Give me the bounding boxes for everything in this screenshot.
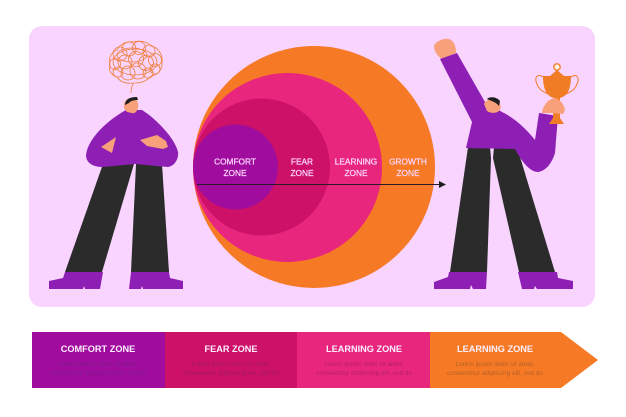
raised fist bbox=[434, 39, 456, 59]
segment: growth arrow: consectetur adipiscing elit, sed do bbox=[447, 370, 543, 377]
comfort zone circle bbox=[193, 124, 278, 210]
growth zone circle bbox=[193, 46, 435, 288]
icon: tangled thought bubble bbox=[109, 41, 162, 93]
body and arms bbox=[440, 53, 558, 172]
segment: learning zone: consectetur adipiscing elit, sed do bbox=[316, 370, 412, 377]
left hand bbox=[101, 137, 116, 153]
hair bbox=[487, 97, 500, 106]
label: learning zone: LEARNING bbox=[335, 156, 377, 166]
torso with crossed arms bbox=[86, 110, 178, 167]
left leg bbox=[450, 147, 491, 272]
segment: growth arrow bbox=[430, 332, 598, 388]
right leg bbox=[131, 164, 169, 272]
panel: background bbox=[29, 26, 595, 307]
segment: learning zone bbox=[297, 332, 430, 388]
segment: comfort zone: Lorem ipsum dolor sit amet, bbox=[59, 361, 138, 368]
segment: fear zone: consectetur adipiscing elit, sed do bbox=[183, 370, 279, 377]
right hand bbox=[140, 135, 168, 149]
segment: growth arrow: Lorem ipsum dolor sit amet, bbox=[456, 361, 535, 368]
segment: comfort zone: consectetur adipiscing elit, sed do bbox=[50, 370, 146, 377]
left leg bbox=[65, 164, 134, 272]
right leg bbox=[493, 147, 555, 272]
segment: learning zone: Lorem ipsum dolor sit amet, bbox=[325, 361, 404, 368]
label: fear zone: ZONE bbox=[290, 168, 314, 178]
learning zone circle bbox=[193, 73, 382, 262]
label: comfort zone: COMFORT bbox=[214, 156, 256, 166]
icon: trophy bbox=[536, 64, 578, 124]
segment: fear zone: Lorem ipsum dolor sit amet, bbox=[192, 361, 271, 368]
label: fear zone: FEAR bbox=[291, 156, 313, 166]
figure: stressed man with crossed arms bbox=[49, 41, 183, 289]
segment: growth arrow: LEARNING ZONE bbox=[457, 344, 533, 354]
label: comfort zone: ZONE bbox=[223, 168, 247, 178]
left shoe bbox=[49, 272, 103, 289]
bar: four zone summary arrow bbox=[32, 332, 598, 388]
head bbox=[484, 99, 501, 113]
segment: learning zone: LEARNING ZONE bbox=[326, 344, 402, 354]
hair bbox=[125, 97, 138, 105]
right shoe bbox=[518, 272, 573, 289]
right shoe bbox=[129, 272, 183, 289]
chart: concentric zone circles bbox=[193, 46, 435, 288]
segment: comfort zone: COMFORT ZONE bbox=[61, 344, 135, 354]
left shoe bbox=[434, 272, 487, 289]
hand gripping trophy bbox=[542, 98, 565, 114]
fear zone circle bbox=[193, 98, 330, 236]
segment: comfort zone bbox=[32, 332, 165, 388]
segment: fear zone: FEAR ZONE bbox=[204, 344, 258, 354]
label: growth zone: GROWTH bbox=[389, 156, 427, 166]
segment: fear zone bbox=[165, 332, 297, 388]
label: learning zone: ZONE bbox=[344, 168, 368, 178]
figure: triumphant man with trophy bbox=[434, 39, 578, 289]
arrow: progress through zones bbox=[197, 181, 446, 188]
label: growth zone: ZONE bbox=[396, 168, 420, 178]
head bbox=[124, 98, 138, 113]
